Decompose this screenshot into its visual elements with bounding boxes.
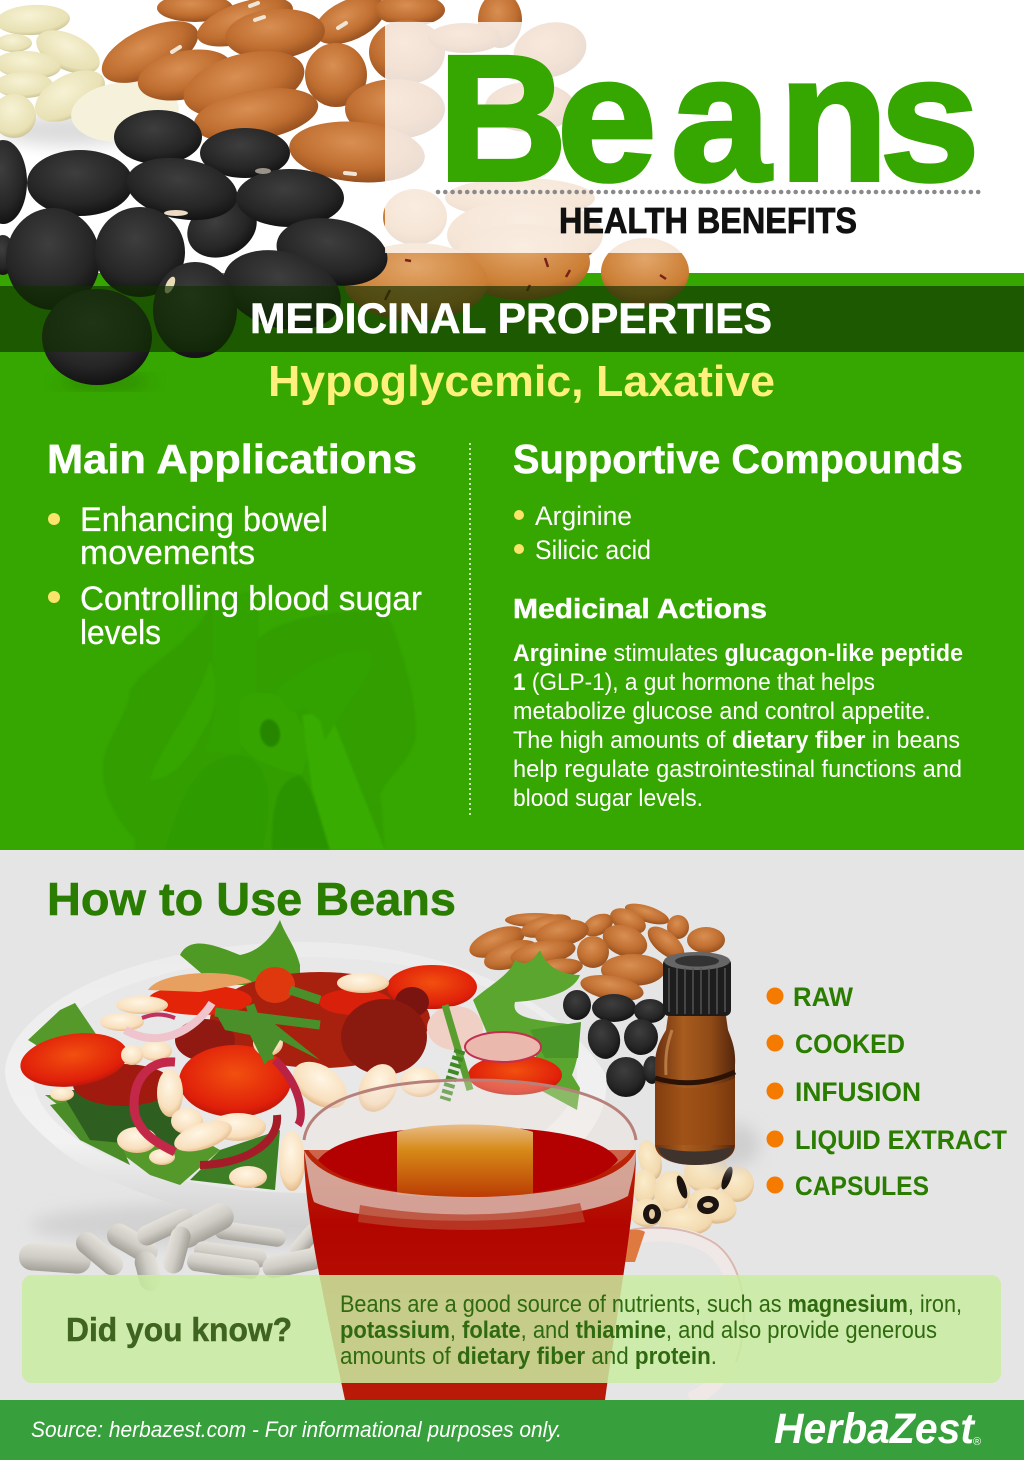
callout heading: Did you know? [66, 1311, 292, 1348]
callout: did you know [22, 1275, 1001, 1383]
medicinal actions paragraph: The high amounts of dietary fiber in beans [513, 727, 960, 754]
photo: salad plate [5, 920, 607, 1247]
photo: amber oil bottle [655, 952, 760, 1167]
bullet: blood sugar: levels [80, 614, 161, 652]
salad onions and herbs [125, 990, 470, 1165]
mug handle [598, 1228, 744, 1400]
subheading: properties list: Hypoglycemic, Laxative [268, 357, 775, 406]
salad greens [28, 920, 581, 1190]
heading: medicinal actions: Medicinal Actions [513, 593, 767, 624]
medicinal actions paragraph: metabolize glucose and control appetite. [513, 698, 931, 725]
photo: capsules [18, 1199, 326, 1293]
bullet: bowel movements: movements [80, 534, 255, 572]
compounds list: Silicic acid [535, 535, 651, 565]
bullet: blood sugar [48, 580, 422, 652]
callout text: amounts of dietary fiber and protein. [340, 1343, 717, 1370]
photo: mug of tea [304, 1080, 744, 1400]
item: capsules: CAPSULES [795, 1171, 929, 1201]
item: raw [766, 982, 853, 1012]
heading: medicinal properties: MEDICINAL PROPERTIES [250, 295, 772, 343]
bullet: bowel movements [48, 501, 328, 572]
callout text [340, 1291, 962, 1370]
heading: how to use beans: How to Use Beans [47, 873, 456, 925]
column: supportive compounds [513, 436, 963, 812]
medicinal actions paragraph [513, 640, 963, 812]
photo: small brown beans [465, 899, 725, 1005]
icon: silhouette of person holding abdomen [103, 590, 416, 850]
white title overlay panel [385, 22, 1024, 253]
item: raw: RAW [793, 982, 853, 1012]
bullet: bowel movements: Enhancing bowel [80, 501, 328, 539]
salad tomatoes and chorizo [17, 965, 562, 1117]
panel: medicinal properties background [0, 273, 1024, 850]
medicinal actions paragraph: Arginine stimulates glucagon-like peptide [513, 640, 963, 667]
footer bar [0, 1400, 1024, 1460]
photo: black-eyed peas [630, 1138, 754, 1236]
heading: main applications: Main Applications [47, 436, 417, 482]
item: liquid extract: LIQUID EXTRACT [795, 1125, 1007, 1155]
item: infusion: INFUSION [795, 1077, 921, 1107]
heading: supportive compounds: Supportive Compounds [513, 436, 963, 482]
column: main applications [47, 436, 422, 652]
title: Beans [438, 18, 980, 218]
photo: assorted beans [0, 0, 689, 388]
subtitle: HEALTH BENEFITS [559, 200, 857, 241]
salad white beans [50, 973, 541, 1191]
compounds list: Arginine [535, 501, 632, 531]
panel: how to use [0, 850, 1024, 1400]
callout text: potassium, folate, and thiamine, and also provide generous [340, 1317, 937, 1344]
bullet: blood sugar: Controlling blood sugar [80, 580, 422, 618]
usage forms list [766, 982, 1007, 1201]
logo: herbazest: HerbaZest [774, 1405, 976, 1453]
medicinal actions paragraph: 1 (GLP-1), a gut hormone that helps [513, 669, 875, 696]
compounds list [514, 501, 651, 565]
medicinal actions paragraph: help regulate gastrointestinal functions and [513, 756, 962, 783]
band: medicinal properties [0, 286, 1024, 352]
item: cooked: COOKED [795, 1029, 905, 1059]
callout text: Beans are a good source of nutrients, such as magnesium, iron, [340, 1291, 962, 1318]
source note: Source: herbazest.com - For informational purposes only. [31, 1417, 562, 1442]
medicinal actions paragraph: blood sugar levels. [513, 785, 703, 812]
logo: herbazest: ® [973, 1436, 981, 1448]
photo: small black beans [563, 990, 666, 1097]
